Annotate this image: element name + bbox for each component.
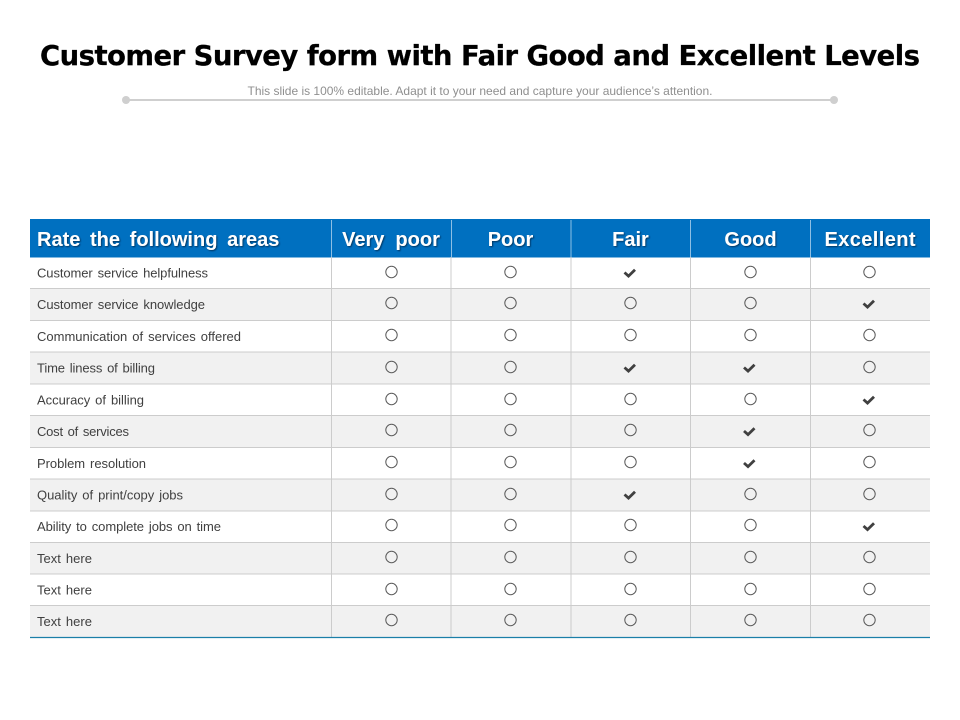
rating marks xyxy=(386,266,875,626)
row labels: Communication of services offered xyxy=(37,329,241,344)
table header: Good xyxy=(724,229,777,251)
table header: Rate the following areas xyxy=(37,229,279,251)
row labels: Accuracy of billing xyxy=(37,392,144,408)
row labels: Text here xyxy=(37,582,92,598)
table header: Poor xyxy=(488,229,533,251)
row stripes xyxy=(30,289,930,638)
table header: Excellent xyxy=(824,229,916,251)
row labels xyxy=(37,266,241,629)
row labels: Ability to complete jobs on time xyxy=(37,519,221,534)
row labels: Quality of print/copy jobs xyxy=(37,488,184,502)
table header: Very poor xyxy=(342,229,440,251)
row labels: Time liness of billing xyxy=(37,360,155,376)
subtitle: This slide is 100% editable. Adapt it to your need and capture your audience’s attention. xyxy=(248,84,712,98)
row labels: Customer service helpfulness xyxy=(37,266,208,280)
table header: Fair xyxy=(612,229,649,251)
row labels: Text here xyxy=(37,551,92,566)
row labels: Cost of services xyxy=(37,424,130,439)
row labels: Problem resolution xyxy=(37,456,146,471)
row labels: Text here xyxy=(37,614,92,629)
row labels: Customer service knowledge xyxy=(37,297,205,312)
title divider xyxy=(122,96,838,104)
survey table xyxy=(30,219,930,638)
title: Customer Survey form with Fair Good and Excellent Levels xyxy=(40,40,920,72)
table header xyxy=(30,219,930,258)
